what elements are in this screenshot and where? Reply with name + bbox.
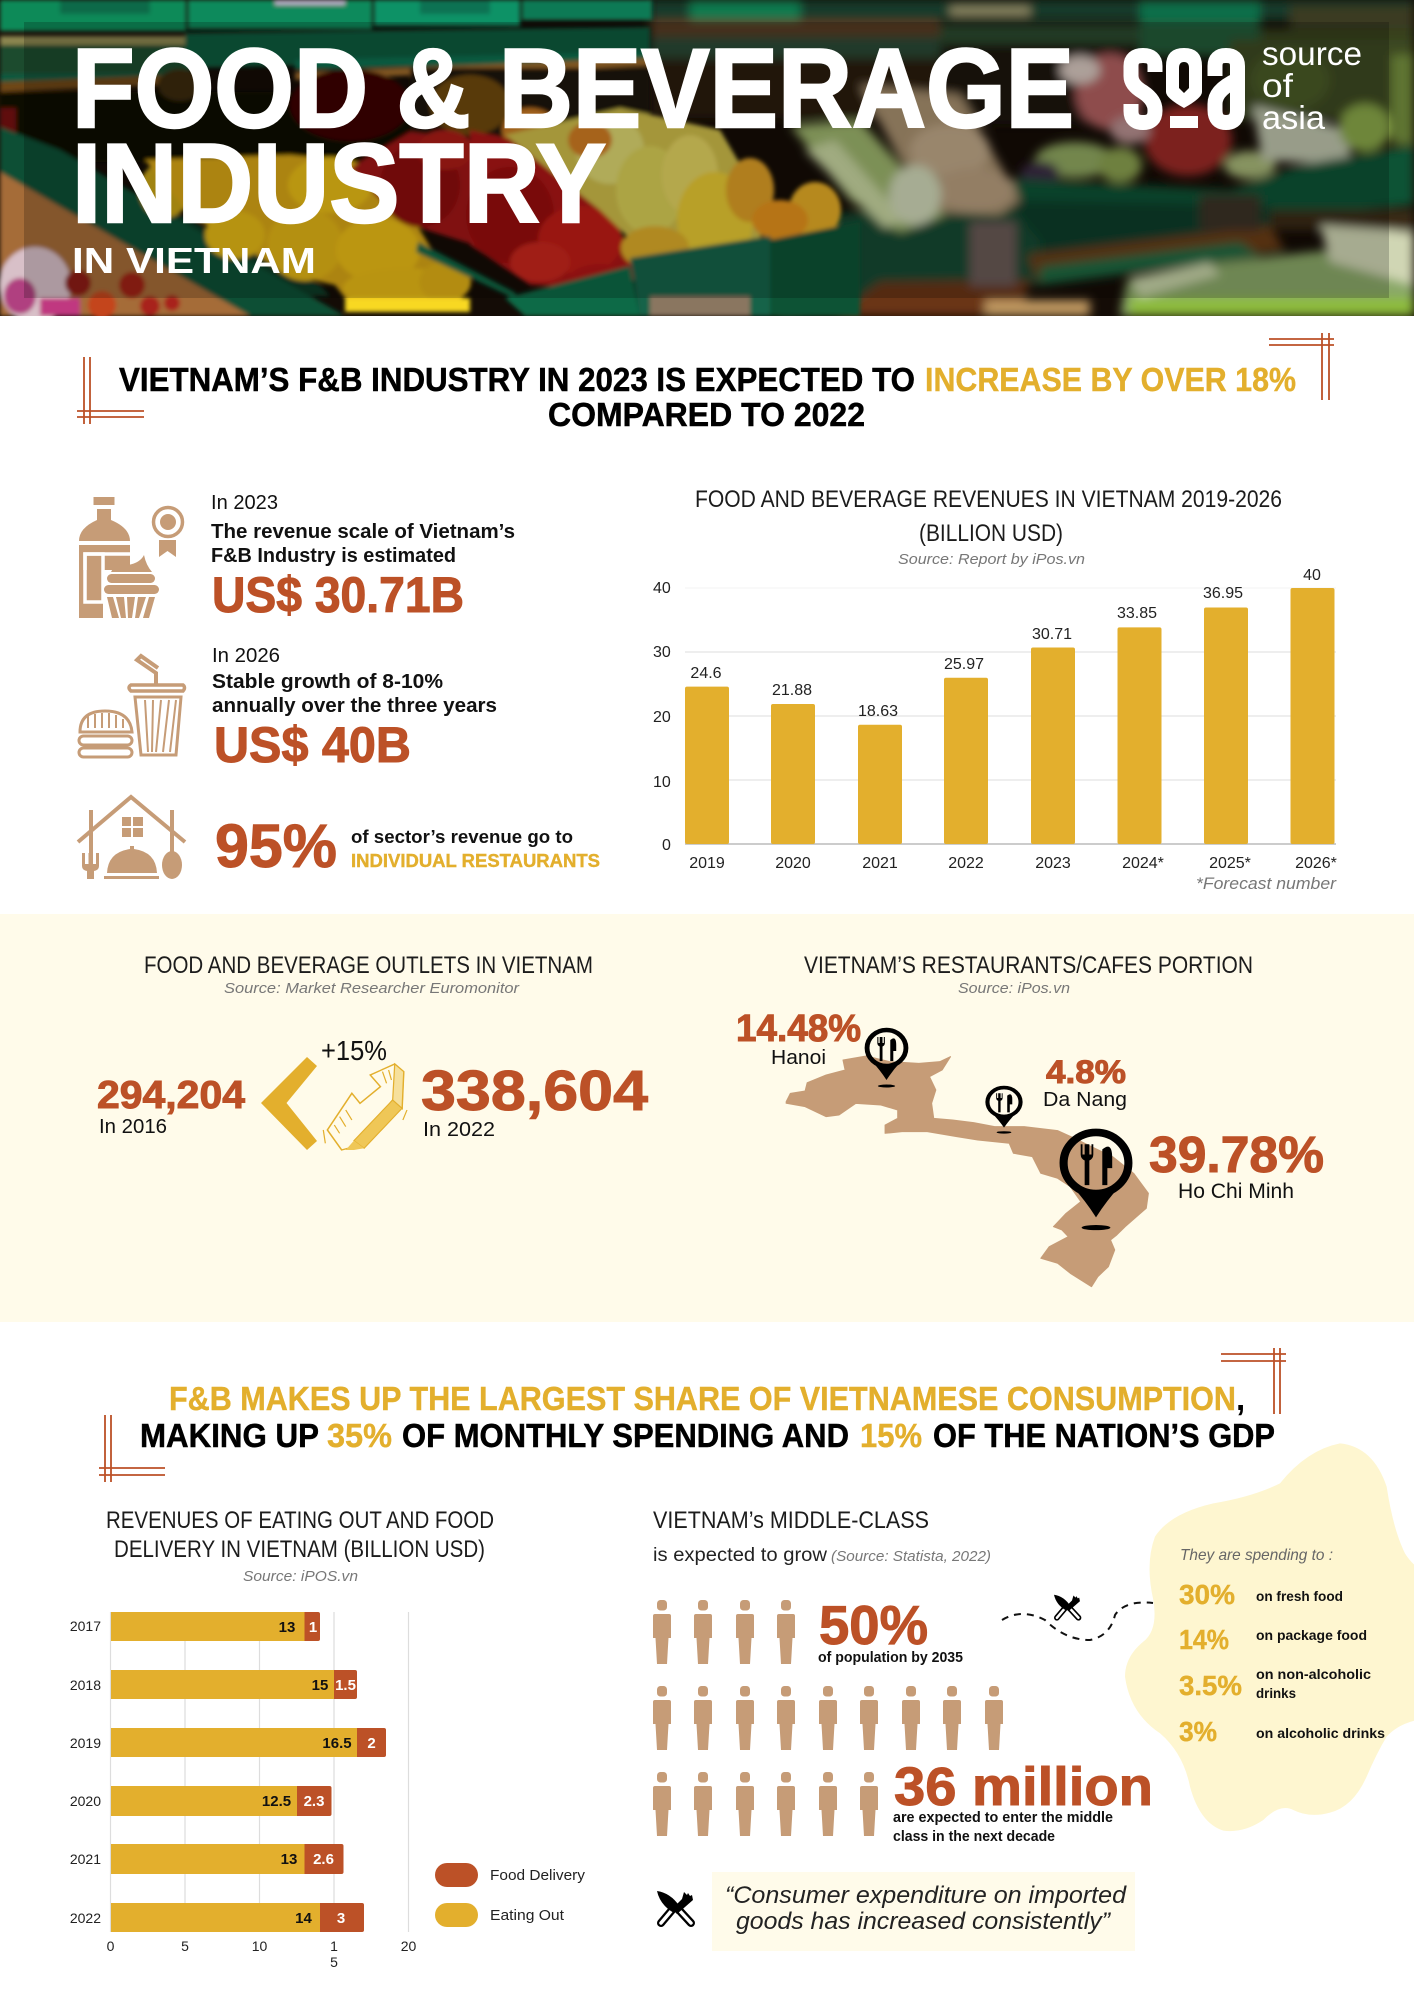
panel: cream band [0,914,1414,1322]
pictogram row 1 [653,1600,795,1664]
stacked bar chart: eating out and food delivery: 2.6 [313,1851,334,1868]
panel: spending blob: 14% [1179,1624,1229,1655]
hero title: FOOD & BEVERAGE [72,26,1074,151]
panel: F&B outlets: In 2016 [99,1116,167,1138]
stacked bar chart: eating out and food delivery: 5 [330,1954,338,1970]
panel: F&B outlets: 338,604 [421,1059,648,1123]
panel: restaurants and cafes map: Ho Chi Minh [1178,1180,1294,1203]
panel: spending blob: on fresh food [1256,1588,1343,1604]
heading: largest share of consumption: 15% [860,1417,922,1454]
panel: middle class: 36 million [894,1757,1153,1817]
panel: F&B outlets: +15% [321,1035,387,1066]
bar chart: F&B revenues 2019-2026: 2021 [862,855,898,872]
bar chart: F&B revenues 2019-2026: 10 [653,774,671,791]
heading: 18% increase: VIETNAM’S F&B INDUSTRY IN 2023 IS EXPECTED TO [119,361,915,398]
chart title: (BILLION USD) [919,520,1063,547]
left sharper part of the photo [0,0,860,323]
text: revenue 2023: F&B Industry is estimated [211,545,456,567]
pin: Ho Chi Minh [1064,1132,1128,1230]
bar chart: F&B revenues 2019-2026: 36.95 [1203,585,1243,602]
panel: spending blob: They are spending to : [1180,1547,1333,1564]
panel: middle class: class in the next decade [893,1828,1055,1845]
panel: F&B outlets: FOOD AND BEVERAGE OUTLETS IN VIETNAM [144,952,593,979]
logo: source of asia: of [1262,67,1294,104]
bar chart: F&B revenues 2019-2026: 2020 [775,855,811,872]
stacked bar chart: eating out and food delivery: 15 [312,1677,328,1694]
panel: F&B outlets: In 2022 [423,1119,495,1141]
panel: middle class: (Source: Statista, 2022) [831,1548,991,1565]
bar chart: F&B revenues 2019-2026: 20 [653,709,671,726]
heading: largest share of consumption: OF THE NATION’S GDP [933,1417,1275,1454]
logo: source of asia: asia [1262,99,1326,136]
stacked bar chart: eating out and food delivery: 20 [401,1938,416,1954]
bar chart: F&B revenues 2019-2026: 25.97 [944,656,984,673]
text: revenue 2026: Stable growth of 8-10% [212,671,443,693]
panel: spending blob: 30% [1179,1579,1235,1610]
stacked bar chart: eating out and food delivery: 0 [107,1938,115,1954]
stacked bar chart: eating out and food delivery: 2021 [70,1851,101,1867]
stacked bar chart: eating out and food delivery: 1.5 [335,1677,356,1694]
stacked bar chart: eating out and food delivery: 2020 [70,1793,101,1809]
text: revenue 2023 [211,492,515,623]
panel: restaurants and cafes map: Source: iPos.vn [958,980,1070,997]
bar chart: F&B revenues 2019-2026: 2024* [1122,855,1164,872]
bar chart: F&B revenues 2019-2026: 33.85 [1117,605,1157,622]
pictogram row 2 [653,1686,1003,1750]
logo: source of asia [1131,35,1362,136]
bar chart: F&B revenues 2019-2026: 2023 [1035,855,1071,872]
text: revenue 2026 [212,645,497,773]
chart title [695,486,1282,568]
text: revenue 2026: annually over the three years [212,695,497,717]
heading: 18% increase: INCREASE BY OVER 18% [925,361,1296,398]
pin: Hanoi [867,1030,906,1088]
text: 95 percent stat: 95% [215,812,337,880]
stacked bar chart: eating out and food delivery: 16.5 [322,1735,352,1752]
icon: crossed cutlery [657,1891,693,1923]
panel: spending blob: drinks [1256,1685,1296,1701]
pictogram row 3 [653,1772,878,1836]
pin: Da Nang [987,1088,1021,1134]
stacked bar chart: eating out and food delivery: 3 [337,1910,345,1927]
bar chart: F&B revenues 2019-2026: *Forecast number [1196,874,1337,893]
text: revenue 2026: In 2026 [212,645,280,667]
hero title: IN VIETNAM [72,240,316,281]
panel: middle class [653,1507,1153,1951]
bar chart: F&B revenues 2019-2026: 30.71 [1032,626,1072,643]
panel: restaurants and cafes map [736,952,1324,1287]
panel: middle class: of population by 2035 [818,1649,963,1666]
panel: restaurants and cafes map: Hanoi [771,1047,826,1069]
text: revenue 2026: US$ 40B [214,717,411,773]
chart title: Source: iPOS.vn [243,1568,358,1585]
panel: middle class: 50% [819,1594,928,1656]
bar chart: F&B revenues 2019-2026: 0 [662,837,671,854]
stacked bar chart: eating out and food delivery: 13 [279,1619,295,1636]
chart title: DELIVERY IN VIETNAM (BILLION USD) [114,1536,485,1563]
text: 95 percent stat [215,812,600,880]
chart title: Source: Report by iPos.vn [898,551,1085,568]
panel: F&B outlets: 294,204 [97,1074,245,1117]
icon: restaurant house [78,797,185,879]
text: revenue 2023: In 2023 [211,492,278,514]
chart title: REVENUES OF EATING OUT AND FOOD [106,1507,494,1534]
stacked bar chart: eating out and food delivery: 2.3 [304,1793,324,1810]
panel: spending blob: 3% [1179,1716,1217,1747]
icon: bottle, cupcake and medal [79,497,182,618]
text: revenue 2023: US$ 30.71B [212,567,464,623]
quote box: “Consumer expenditure on imported [725,1882,1127,1909]
panel: F&B outlets [97,952,648,1150]
chart title [106,1507,494,1585]
icon: burger and drink [79,656,184,757]
quote box [712,1872,1135,1951]
panel: restaurants and cafes map: 4.8% [1046,1054,1126,1090]
panel: restaurants and cafes map: VIETNAM’S RESTAURANTS/CAFES PORTION [804,952,1253,979]
stacked bar chart: eating out and food delivery: 5 [181,1938,189,1954]
panel: restaurants and cafes map: 39.78% [1149,1126,1324,1183]
panel: spending blob: on package food [1256,1627,1367,1643]
panel: middle class: is expected to grow [653,1545,827,1566]
bar chart: F&B revenues 2019-2026: 40 [1303,567,1321,584]
logo: source of asia: source [1262,35,1362,72]
stacked bar chart: eating out and food delivery: 2019 [70,1735,101,1751]
panel: middle class: are expected to enter the middle [893,1809,1113,1826]
text: 95 percent stat: of sector’s revenue go to [351,827,573,847]
heading: largest share of consumption: OF MONTHLY SPENDING AND [402,1417,849,1454]
legend: Food Delivery [490,1867,586,1884]
stacked bar chart: eating out and food delivery: 2017 [70,1618,101,1634]
bar chart: F&B revenues 2019-2026 [653,486,1337,893]
hero title [72,26,1074,281]
right blurred part of the photo [650,0,1414,316]
stacked bar chart: eating out and food delivery: 2022 [70,1910,101,1926]
panel: F&B outlets: Source: Market Researcher Euromonitor [224,980,520,997]
stacked bar chart: eating out and food delivery: 1 [330,1938,338,1954]
icon: chevron [261,1057,317,1150]
panel: spending blob: on alcoholic drinks [1256,1725,1385,1741]
bar chart: F&B revenues 2019-2026: 21.88 [772,682,812,699]
heading: 18% increase: COMPARED TO 2022 [548,396,865,433]
stacked bar chart: eating out and food delivery: 1 [309,1619,317,1636]
stacked bar chart: eating out and food delivery: 2018 [70,1677,101,1693]
bar chart: F&B revenues 2019-2026: 2019 [689,855,725,872]
bar chart: F&B revenues 2019-2026: 24.6 [690,665,722,682]
stacked bar chart: eating out and food delivery: 12.5 [262,1793,291,1810]
heading: 18% increase [77,333,1334,433]
panel: middle class: VIETNAM’s MIDDLE-CLASS [653,1507,929,1534]
hero title: INDUSTRY [72,121,606,246]
panel: spending blob [1125,1443,1414,1831]
stacked bar chart: eating out and food delivery: 14 [295,1910,312,1927]
text: 95 percent stat: INDIVIDUAL RESTAURANTS [351,851,600,871]
heading: largest share of consumption: MAKING UP [140,1417,319,1454]
icon: small crossed cutlery [1054,1595,1080,1618]
text: revenue 2023: The revenue scale of Vietnam’s [211,521,515,543]
chart title: FOOD AND BEVERAGE REVENUES IN VIETNAM 2019-2026 [695,486,1282,513]
stacked bar chart: eating out and food delivery: 2 [367,1735,376,1752]
bar chart: F&B revenues 2019-2026: 40 [653,580,671,597]
heading: largest share of consumption: , [1236,1380,1245,1417]
bar chart: F&B revenues 2019-2026: 2026* [1295,855,1337,872]
panel: spending blob: on non-alcoholic [1256,1666,1371,1682]
legend: Eating Out [490,1907,565,1924]
heading: largest share of consumption: F&B MAKES UP THE LARGEST SHARE OF VIETNAMESE CONSUMPTION [169,1380,1236,1417]
panel: spending blob: 3.5% [1179,1670,1242,1701]
stacked bar chart: eating out and food delivery: 13 [281,1851,297,1868]
heading: largest share of consumption [99,1348,1286,1482]
icon: sketched rising arrow [323,1064,407,1150]
dashed path [1002,1602,1153,1640]
heading: largest share of consumption: 35% [327,1417,392,1454]
panel: hero photo banner [0,0,1414,323]
bar chart: F&B revenues 2019-2026: 30 [653,644,671,661]
stacked bar chart: eating out and food delivery: 10 [252,1938,267,1954]
bar chart: F&B revenues 2019-2026: 2025* [1209,855,1251,872]
panel: restaurants and cafes map: 14.48% [736,1008,861,1050]
legend [435,1863,586,1927]
panel: restaurants and cafes map: Da Nang [1043,1089,1127,1111]
stacked bar chart: eating out and food delivery [70,1507,586,1970]
quote box: goods has increased consistently” [736,1908,1111,1935]
bar chart: F&B revenues 2019-2026: 18.63 [858,703,898,720]
bar chart: F&B revenues 2019-2026: 2022 [948,855,984,872]
map of Vietnam [786,1056,1148,1287]
